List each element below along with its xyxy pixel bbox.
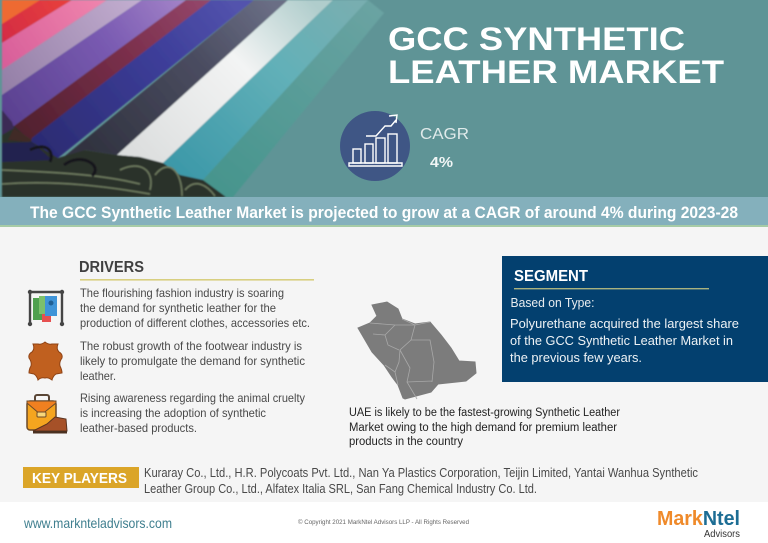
driver text: fashion industry [80, 286, 310, 330]
driver text: animal cruelty: Rising awareness regarding the animal cruelty [80, 391, 305, 405]
driver text: footwear industry [80, 339, 305, 383]
photo: rolls of coloured synthetic leather [2, 0, 384, 197]
UAE callout text: UAE is likely to be the fastest-growing Synthetic Leather [349, 407, 620, 419]
icon: CAGR growth chart [340, 111, 410, 181]
panel: segment: of the GCC Synthetic Leather Market in [510, 333, 733, 348]
CAGR label: CAGR [420, 126, 469, 143]
driver text: fashion industry: production of different clothes, accessories etc. [80, 316, 310, 330]
icon: briefcase and shoe [27, 395, 67, 434]
panel: segment: Based on Type: [510, 296, 594, 310]
website: www.marknteladvisors.com [23, 515, 172, 531]
title [388, 21, 725, 90]
icon: clothes rack [28, 290, 64, 326]
title: GCC SYNTHETIC [388, 21, 685, 57]
UAE callout text [349, 407, 620, 448]
icon: leather hide [29, 342, 62, 380]
driver text: fashion industry: the demand for synthetic leather for the [80, 301, 276, 315]
driver text: fashion industry: The flourishing fashion industry is soaring [80, 286, 284, 300]
driver text: animal cruelty [80, 391, 305, 435]
panel: segment: the previous few years. [510, 350, 642, 365]
content panel background [0, 227, 768, 502]
driver text: footwear industry: likely to promulgate the demand for synthetic [80, 354, 305, 368]
driver text: animal cruelty: leather-based products. [80, 421, 197, 435]
logo: MarkNtel Advisors: MarkNtel [657, 508, 740, 530]
panel: segment: SEGMENT [514, 268, 588, 285]
driver text: footwear industry: leather. [80, 369, 116, 383]
copyright: © Copyright 2021 MarkNtel Advisors LLP - All Rights Reserved [298, 519, 469, 526]
key players list [144, 465, 698, 496]
logo: MarkNtel Advisors: Advisors [704, 529, 740, 540]
key players list: Leather Group Co., Ltd., Alfatex Italia SRL, San Fang Chemical Industry Co. Ltd. [144, 481, 537, 496]
panel: segment [502, 256, 768, 382]
heading: drivers: DRIVERS [79, 259, 144, 276]
driver text: footwear industry: The robust growth of the footwear industry is [80, 339, 302, 353]
panel: segment: Polyurethane acquired the largest share [510, 316, 739, 331]
header teal background [0, 0, 768, 197]
logo: MarkNtel Advisors [657, 508, 740, 540]
title: LEATHER MARKET [388, 54, 725, 90]
UAE callout text: products in the country [349, 436, 463, 448]
CAGR value: 4% [430, 154, 453, 171]
map of Saudi Arabia [358, 302, 476, 399]
UAE callout text: Market owing to the high demand for premium leather [349, 422, 617, 434]
banner [0, 197, 768, 227]
driver text: animal cruelty: is increasing the adoption of synthetic [80, 406, 266, 420]
key players badge: KEY PLAYERS [32, 470, 127, 487]
